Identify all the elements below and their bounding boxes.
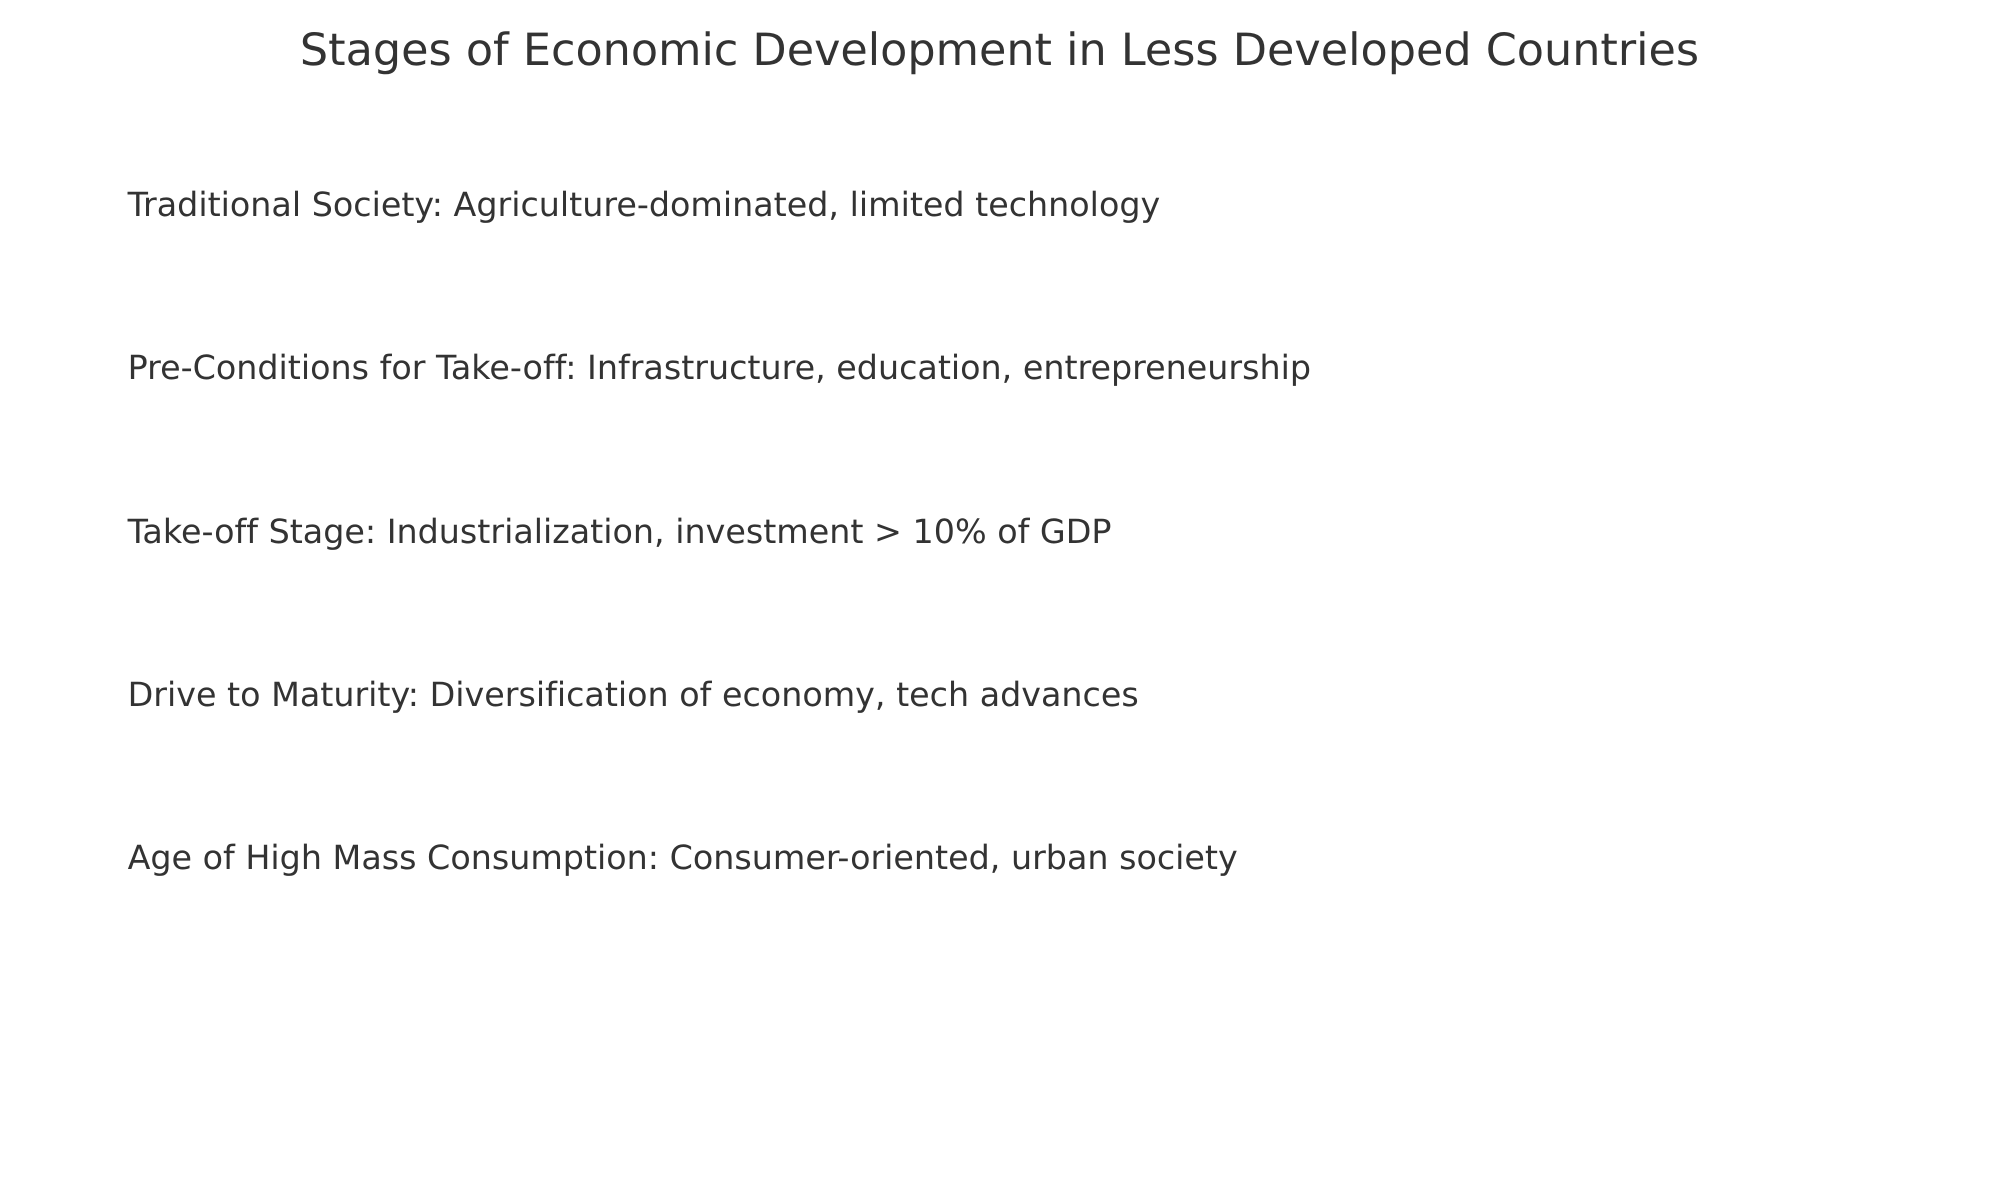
stage 1: traditional society: Traditional Society: Agriculture-dominated, limited technology [127,185,1160,224]
title: Stages of Economic Development in Less Developed Countries [300,25,1699,76]
stage 3: take-off stage: Take-off Stage: Industrialization, investment > 10% of GDP [127,512,1112,551]
stage 2: pre-conditions for take-off: Pre-Conditions for Take-off: Infrastructure, education, entrepreneurship [128,348,1311,387]
stage 4: drive to maturity: Drive to Maturity: Diversification of economy, tech advances [128,675,1139,714]
stage list [127,185,1311,877]
stage 5: age of high mass consumption: Age of High Mass Consumption: Consumer-oriented, urban society [128,838,1238,877]
